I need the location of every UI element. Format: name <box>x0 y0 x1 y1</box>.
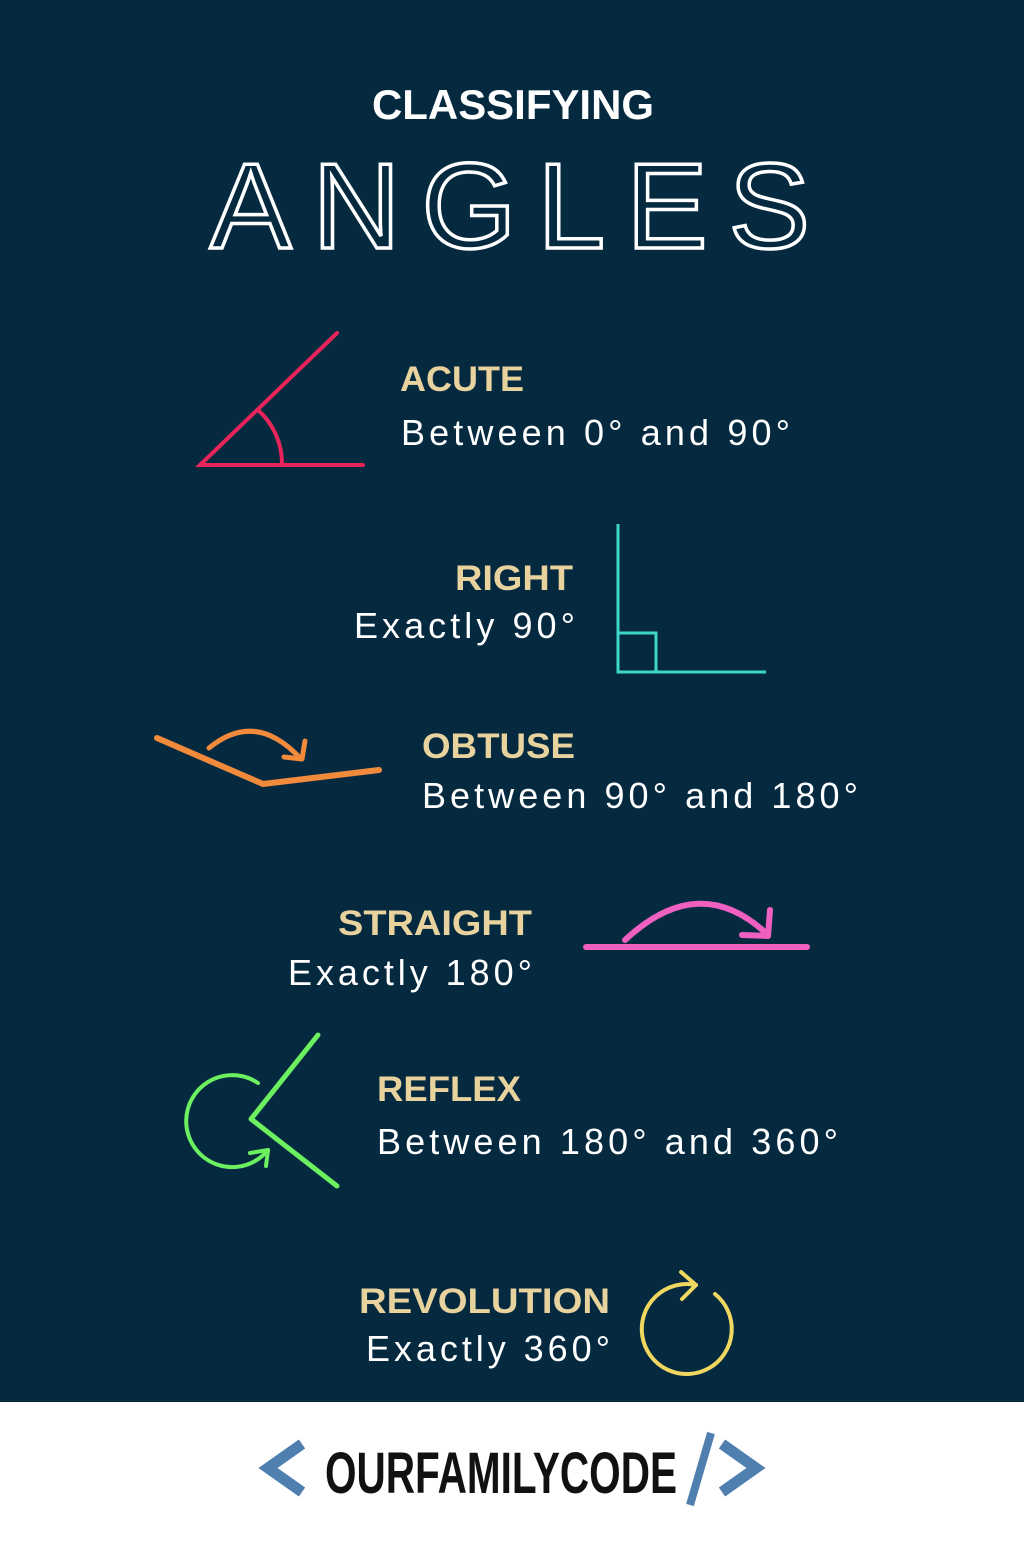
icon: obtuse angle <box>157 731 379 784</box>
title: angles: ANGLES <box>210 138 810 274</box>
label: straight: STRAIGHT <box>338 904 532 943</box>
label: right: RIGHT <box>455 559 573 598</box>
label: acute <box>400 360 790 453</box>
label: acute: Between 0° and 90° <box>401 412 790 453</box>
label: revolution <box>359 1282 610 1369</box>
title: classifying: CLASSIFYING <box>372 81 654 128</box>
label: obtuse: Between 90° and 180° <box>422 775 858 816</box>
label: revolution: REVOLUTION <box>359 1282 610 1321</box>
label: obtuse <box>422 727 858 816</box>
label: straight: Exactly 180° <box>288 952 532 993</box>
footer logo: OURFAMILYCODE <box>325 1441 677 1506</box>
label: reflex: Between 180° and 360° <box>377 1121 838 1162</box>
icon: reflex angle <box>186 1035 337 1186</box>
label: straight <box>288 904 532 993</box>
label: reflex: REFLEX <box>377 1070 522 1109</box>
icon: right angle <box>618 524 766 672</box>
label: obtuse: OBTUSE <box>422 727 575 766</box>
label: reflex <box>377 1070 838 1162</box>
footer logo <box>268 1433 756 1506</box>
icon: revolution <box>642 1272 732 1374</box>
label: right <box>354 559 575 646</box>
icon: acute angle <box>200 333 363 465</box>
label: acute: ACUTE <box>400 360 524 399</box>
label: revolution: Exactly 360° <box>366 1328 610 1369</box>
icon: straight angle <box>586 904 807 947</box>
label: right: Exactly 90° <box>354 605 575 646</box>
